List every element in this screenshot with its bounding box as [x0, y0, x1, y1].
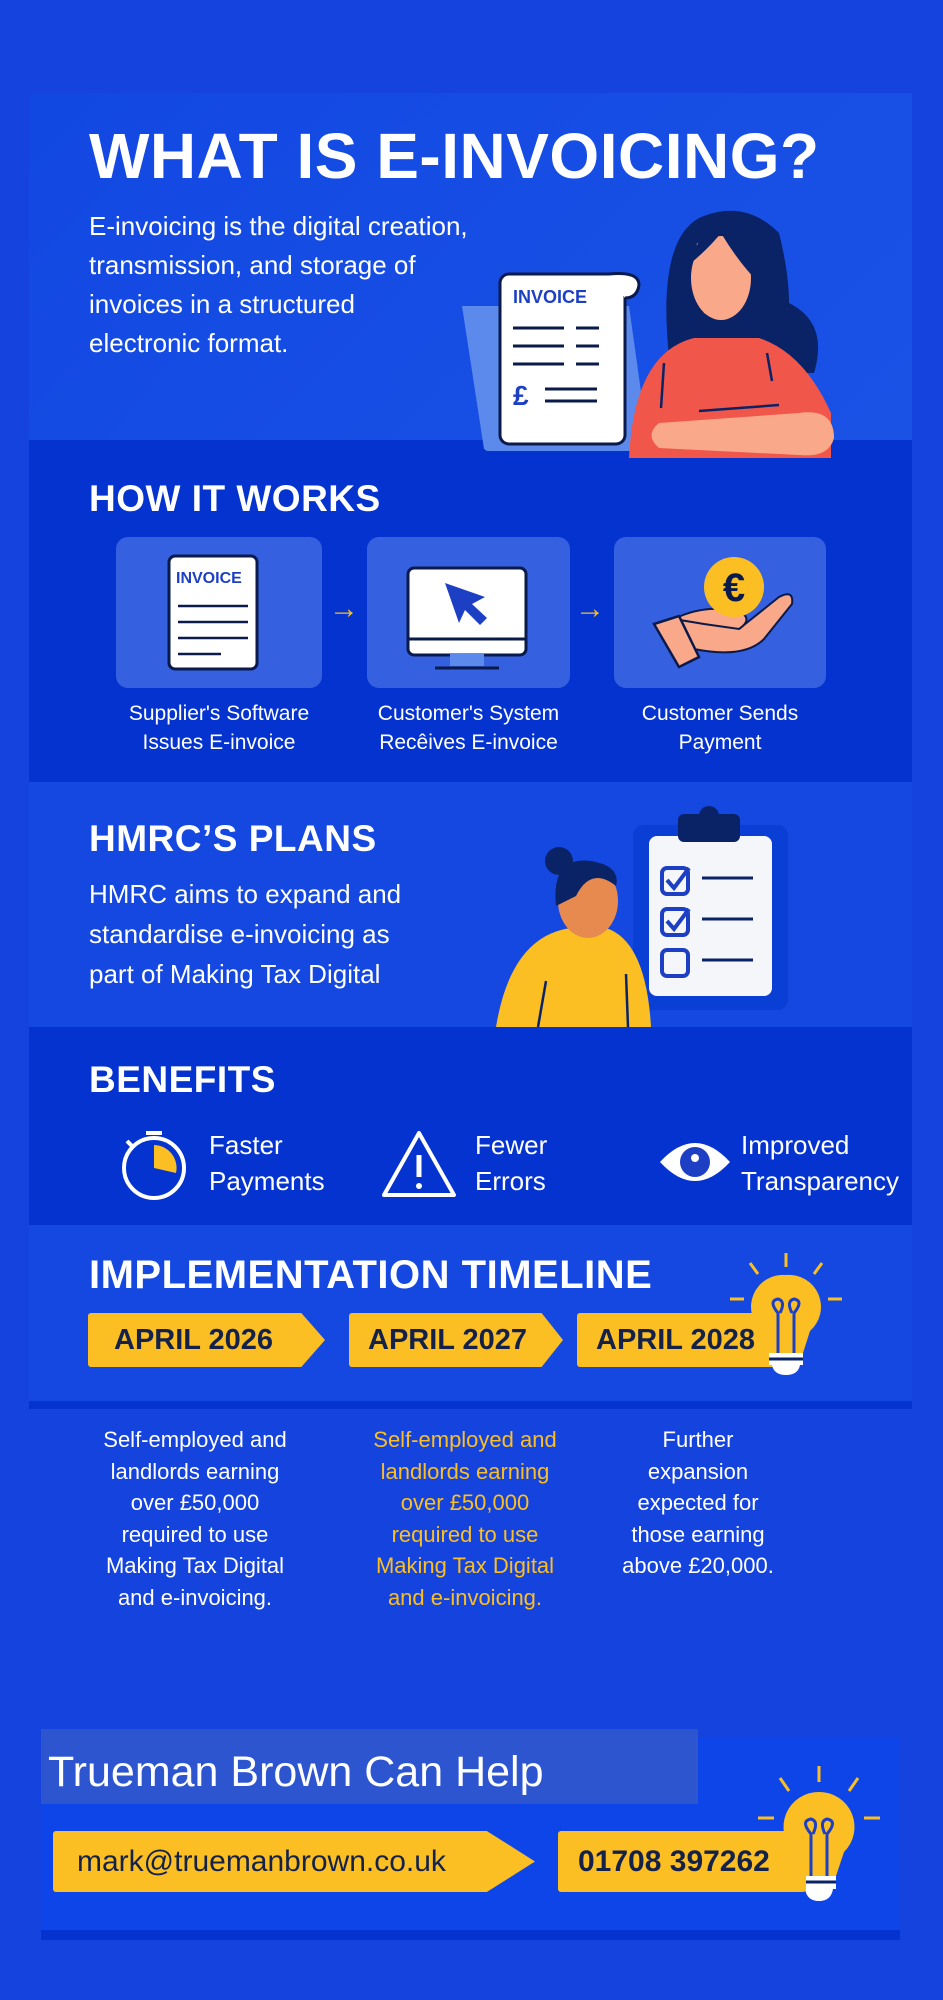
- text block: 2027 detail: Self-employed and: [373, 1427, 557, 1452]
- text block: 2028 detail: [622, 1427, 774, 1578]
- text block: 2028 detail: those earning: [631, 1522, 765, 1546]
- step 3: [614, 537, 826, 754]
- step 1: INVOICE: [176, 570, 242, 587]
- text block: definition: invoices in a structured: [89, 289, 355, 319]
- heading: BENEFITS: [89, 1059, 276, 1100]
- heading: trueman brown can help: [41, 1729, 698, 1804]
- text block: 2028 detail: expansion: [648, 1458, 748, 1484]
- timeline arrow 2026: APRIL 2026: [114, 1324, 273, 1356]
- icon: light bulb: [730, 1253, 842, 1375]
- text block: hmrc: standardise e-invoicing as: [89, 919, 390, 949]
- text block: 2028 detail: Further: [663, 1427, 733, 1452]
- step 1: Supplier's Software: [129, 702, 309, 725]
- text block: definition: electronic format.: [89, 328, 288, 358]
- panel: what is e-invoicing: [29, 93, 912, 440]
- arrow 1: →: [329, 592, 359, 625]
- benefit: improved transparency: Transparency: [741, 1166, 899, 1196]
- illustration: woman at laptop: [462, 210, 834, 458]
- step 1: [116, 537, 322, 754]
- illustration: woman at laptop: £: [513, 380, 529, 411]
- panel: hmrc's plans: [29, 782, 912, 1027]
- benefit: improved transparency: Improved: [741, 1130, 849, 1160]
- text block: hmrc: HMRC aims to expand and: [89, 879, 401, 909]
- text block: 2026 detail: over £50,000: [131, 1490, 259, 1515]
- text block: hmrc: part of Making Tax Digital: [89, 959, 380, 989]
- text block: 2027 detail: landlords earning: [381, 1458, 549, 1484]
- panel: contact: [41, 1738, 900, 1940]
- illustration: woman with clipboard: [496, 806, 788, 1027]
- illustration: woman at laptop: INVOICE: [513, 287, 587, 307]
- text block: 2026 detail: and e-invoicing.: [118, 1584, 272, 1610]
- text block: 2027 detail: and e-invoicing.: [388, 1584, 542, 1610]
- icon: light bulb: [758, 1766, 880, 1901]
- text block: definition: E-invoicing is the digital creation,: [89, 211, 468, 241]
- benefit: faster payments: [122, 1130, 325, 1200]
- text block: 2026 detail: landlords earning: [111, 1458, 279, 1484]
- text block: 2027 detail: required to use: [392, 1522, 538, 1546]
- phone box: [558, 1831, 806, 1892]
- arrow 2: →: [575, 592, 605, 625]
- benefit: fewer errors: [382, 1130, 547, 1197]
- timeline arrow 2028: [577, 1313, 772, 1367]
- panel: benefits: [29, 1027, 912, 1225]
- step 1: Issues E-invoice: [143, 731, 295, 754]
- timeline arrow 2028: APRIL 2028: [596, 1324, 755, 1356]
- text block: hmrc: [89, 879, 401, 989]
- heading: HMRC’S PLANS: [89, 818, 377, 859]
- text block: 2028 detail: expected for: [637, 1490, 759, 1515]
- benefit: fewer errors: Errors: [475, 1166, 546, 1196]
- text block: 2026 detail: [103, 1427, 287, 1610]
- step 3: €: [723, 566, 745, 610]
- text block: 2026 detail: Self-employed and: [103, 1427, 287, 1452]
- text block: definition: [89, 211, 468, 358]
- email arrow: [53, 1831, 535, 1892]
- text block: 2028 detail: above £20,000.: [622, 1553, 774, 1578]
- step 2: [367, 537, 570, 754]
- step 3: Customer Sends: [642, 702, 798, 725]
- text block: definition: transmission, and storage of: [89, 250, 416, 280]
- text block: 2027 detail: [373, 1427, 557, 1610]
- panel: how it works: [29, 440, 912, 782]
- phone box: 01708 397262: [578, 1845, 770, 1878]
- timeline arrow 2026: [88, 1313, 325, 1367]
- timeline arrow 2027: APRIL 2027: [368, 1324, 527, 1356]
- title: WHAT IS E-INVOICING?: [89, 120, 820, 192]
- heading: HOW IT WORKS: [89, 478, 381, 519]
- step 3: Payment: [679, 731, 761, 754]
- benefit: fewer errors: Fewer: [475, 1130, 547, 1160]
- benefit: faster payments: Faster: [209, 1130, 283, 1160]
- text block: 2027 detail: Making Tax Digital: [376, 1553, 554, 1578]
- text block: 2026 detail: required to use: [122, 1522, 268, 1546]
- panel: implementation timeline: [29, 1253, 912, 1409]
- heading: IMPLEMENTATION TIMELINE: [89, 1253, 652, 1297]
- benefit: faster payments: Payments: [209, 1166, 325, 1196]
- step 2: Recêives E-invoice: [379, 731, 558, 754]
- step 2: Customer's System: [378, 702, 559, 725]
- text block: 2027 detail: over £50,000: [401, 1490, 529, 1515]
- timeline arrow 2027: [349, 1313, 563, 1367]
- heading: trueman brown can help: Trueman Brown Can Help: [48, 1748, 544, 1796]
- text block: 2026 detail: Making Tax Digital: [106, 1553, 284, 1578]
- benefit: improved transparency: [660, 1130, 899, 1196]
- email arrow: mark@truemanbrown.co.uk: [77, 1845, 446, 1878]
